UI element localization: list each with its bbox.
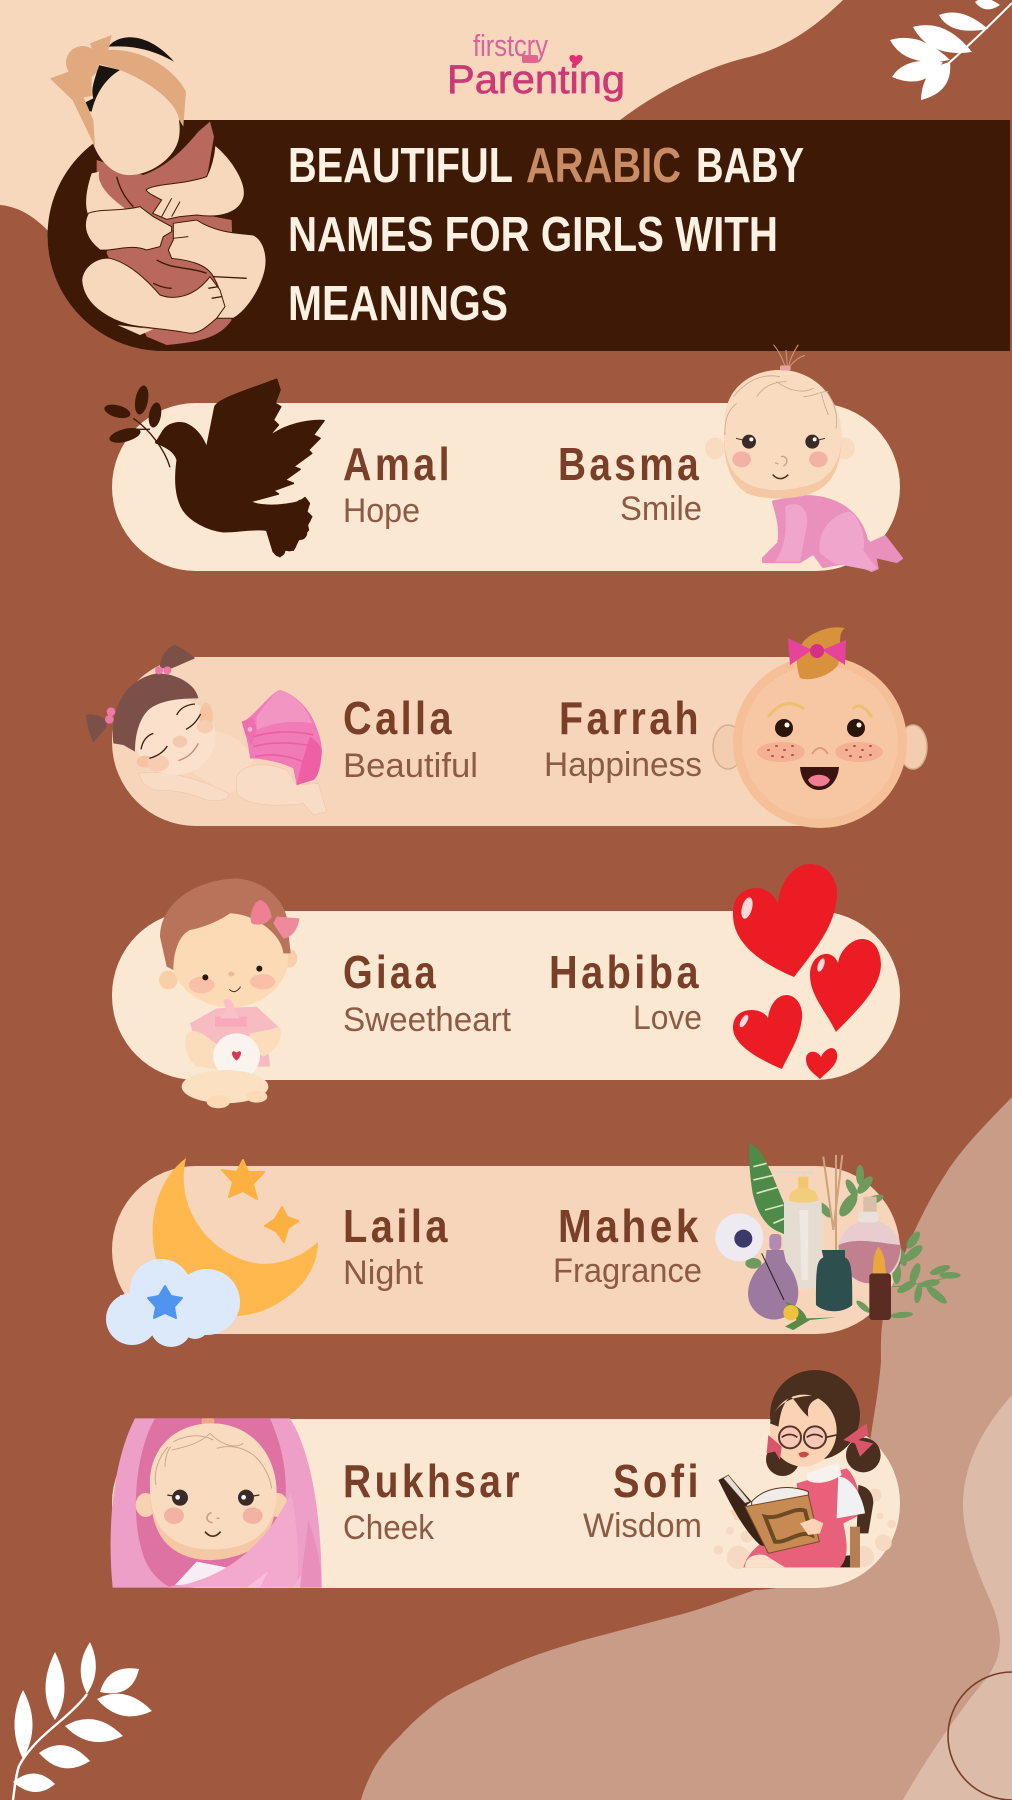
logo: Parenting: Parenting <box>447 58 625 102</box>
name: Basma: Basma <box>558 438 702 490</box>
name: Laila: Laila <box>343 1200 451 1252</box>
meaning: Beautiful: Beautiful <box>343 747 478 785</box>
name: Farrah: Farrah <box>559 692 702 744</box>
title: NAMES FOR GIRLS WITH <box>288 208 778 262</box>
panel: Laila and Mahek <box>106 1143 961 1347</box>
icon: crawling baby in pink <box>705 345 902 571</box>
title: ARABIC <box>526 139 681 193</box>
logo: firstcry: firstcry <box>473 28 548 63</box>
meaning: Happiness: Happiness <box>544 746 702 784</box>
icon: moon, stars and cloud <box>106 1158 318 1347</box>
logo: com <box>522 55 538 63</box>
title: BABY <box>696 139 804 193</box>
name: Sofi: Sofi <box>613 1455 702 1507</box>
name: Mahek: Mahek <box>558 1200 702 1252</box>
icon: baby with bottle <box>159 878 299 1108</box>
title: BEAUTIFUL <box>288 139 513 193</box>
name: Rukhsar: Rukhsar <box>343 1455 523 1507</box>
panel: Giaa and Habiba <box>112 864 900 1108</box>
name: Calla: Calla <box>343 692 455 744</box>
background shape: medium bottom right <box>361 1097 1012 1800</box>
icon: baby with headband <box>50 35 266 345</box>
icon: baby wrapped in pink blanket <box>111 1418 322 1588</box>
panel: Rukhsar and Sofi <box>111 1370 900 1588</box>
meaning: Love: Love <box>633 999 702 1037</box>
logo <box>447 28 625 102</box>
name: Habiba: Habiba <box>549 946 702 998</box>
icon: dove with olive branch <box>103 379 324 557</box>
name: Amal: Amal <box>343 438 453 490</box>
icon: leaves bottom left <box>13 1642 152 1800</box>
pill background <box>112 1419 900 1588</box>
panel: Amal and Basma <box>103 345 902 571</box>
background shape: light bottom right <box>903 1395 1012 1800</box>
icon: baby face with bow <box>713 627 927 828</box>
icon: sleeping baby <box>86 645 327 815</box>
title <box>288 139 804 331</box>
header band <box>48 120 1010 351</box>
meaning: Hope: Hope <box>343 492 420 530</box>
pill background <box>112 911 900 1080</box>
decorative circle outline <box>948 1672 1012 1800</box>
pill background <box>112 403 900 571</box>
icon: leaves top right <box>890 0 1012 100</box>
icon: red hearts <box>733 864 881 1079</box>
meaning: Wisdom: Wisdom <box>583 1507 702 1545</box>
meaning: Cheek: Cheek <box>343 1509 435 1547</box>
meaning: Sweetheart: Sweetheart <box>343 1001 512 1039</box>
meaning: Fragrance: Fragrance <box>553 1252 702 1290</box>
pill background <box>112 657 900 826</box>
name: Giaa: Giaa <box>343 946 439 998</box>
meaning: Night: Night <box>343 1254 424 1292</box>
logo: heart <box>569 55 583 66</box>
icon: girl reading a book <box>714 1370 896 1569</box>
background shape: peach top <box>0 0 843 245</box>
title: MEANINGS <box>288 277 508 331</box>
icon: perfume bottles and plants <box>715 1143 961 1330</box>
meaning: Smile: Smile <box>620 490 702 528</box>
panel: Calla and Farrah <box>86 627 927 828</box>
pill background <box>112 1166 900 1334</box>
